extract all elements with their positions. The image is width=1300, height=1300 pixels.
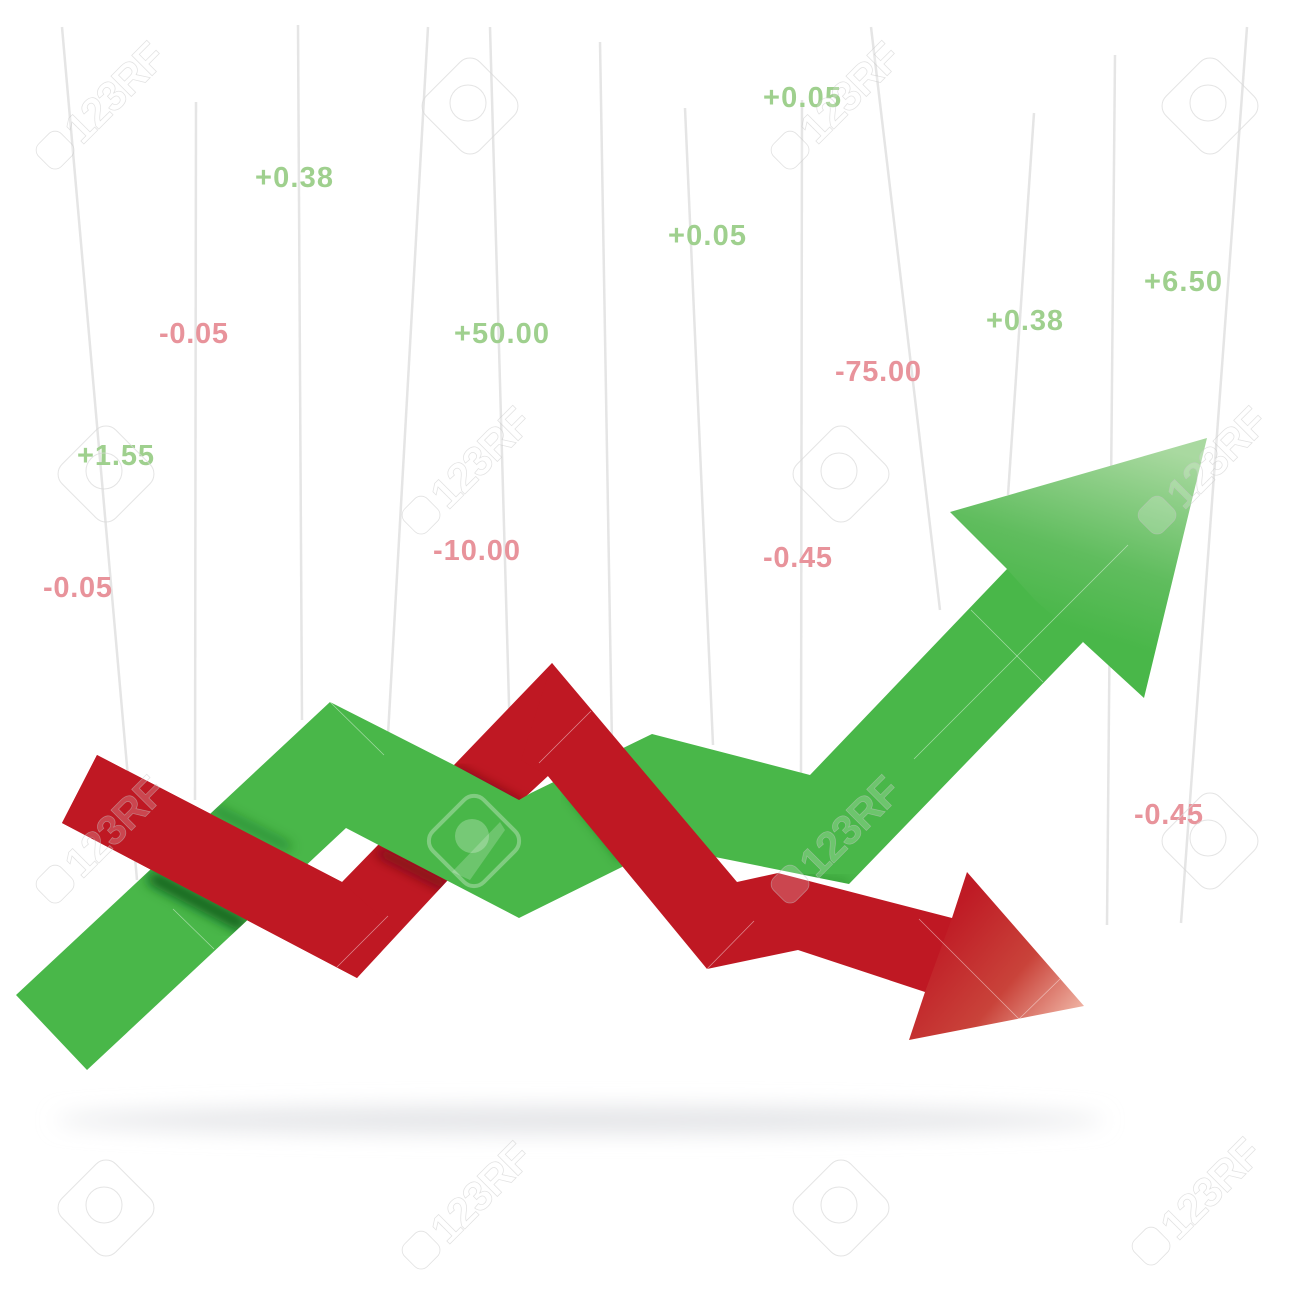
watermarks: 123RF: [790, 767, 910, 886]
value labels: [43, 82, 1222, 831]
value labels: -75.00: [835, 356, 921, 388]
green arrow: [16, 438, 1207, 1070]
red arrow: lower layer running beneath the green arrow: [62, 663, 640, 978]
value labels: -0.05: [159, 318, 228, 350]
value labels: -0.05: [43, 572, 112, 604]
red arrow head: [909, 872, 1084, 1040]
value labels: +0.05: [668, 220, 746, 252]
ground shadow: [55, 1107, 1105, 1133]
watermarks: 123RF: [421, 398, 541, 517]
shadow cast by green on red: [378, 771, 521, 887]
value labels: +0.05: [763, 82, 841, 114]
value labels: +6.50: [1144, 266, 1222, 298]
red left section: [62, 755, 395, 978]
fold highlight lines: [173, 545, 1128, 1019]
watermarks: 123RF: [790, 33, 910, 152]
value labels: +50.00: [454, 318, 549, 350]
value labels: -0.45: [1134, 799, 1203, 831]
value labels: +1.55: [77, 440, 154, 472]
red arrow: upper layer over the green arrow: [62, 663, 1084, 1040]
green arrow shaft: [16, 569, 1083, 1070]
watermarks: 123RF: [421, 1133, 541, 1252]
value labels: +0.38: [986, 305, 1063, 337]
watermarks: 123RF: [55, 767, 175, 886]
value labels: -10.00: [433, 535, 520, 567]
vertical grid lines: [62, 25, 1247, 925]
watermarks: 123RF: [1151, 1129, 1271, 1248]
watermarks: 123RF: [55, 33, 175, 152]
green arrow head: [950, 438, 1207, 698]
value labels: -0.45: [763, 542, 832, 574]
red right section: [521, 663, 975, 992]
value labels: +0.38: [255, 162, 333, 194]
watermarks: 123RF: [1157, 398, 1277, 517]
shadow cast by red on green: [150, 790, 850, 926]
